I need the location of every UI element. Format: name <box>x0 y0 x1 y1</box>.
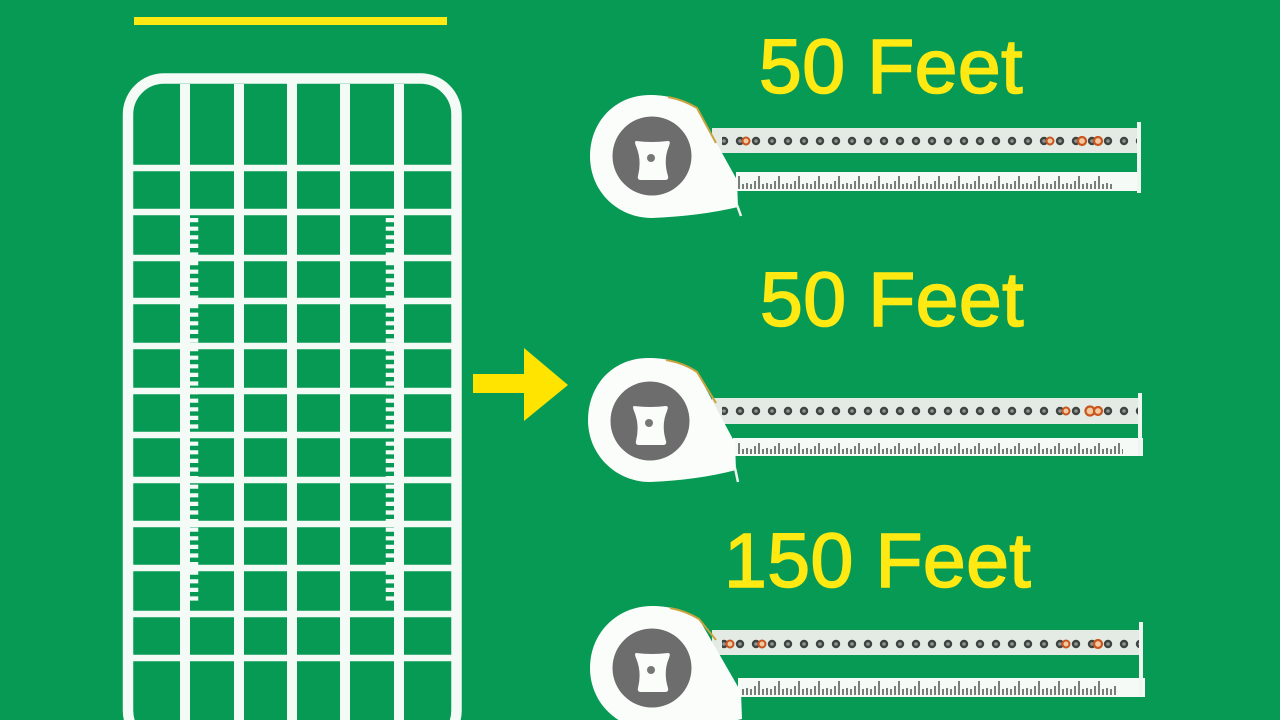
knob hole <box>647 666 655 674</box>
tape measure 2 <box>588 358 1143 482</box>
arrow <box>473 348 568 421</box>
lower tape ruler <box>736 172 1140 191</box>
heading: second 50 Feet: 50 Feet <box>760 257 1024 343</box>
top yellow line <box>134 17 447 25</box>
heading: 150 Feet: 150 Feet <box>724 518 1031 604</box>
case edge <box>670 608 716 640</box>
case edge <box>668 97 716 143</box>
grid horizontal bars <box>132 168 453 658</box>
tape end bar <box>1138 393 1142 456</box>
white grid panel <box>128 78 456 720</box>
tape case <box>588 358 736 482</box>
tape case <box>590 95 738 218</box>
case hook <box>735 468 738 482</box>
case edge <box>666 360 716 403</box>
tape end bar <box>1137 122 1141 193</box>
grid frame <box>128 78 456 720</box>
right comb teeth <box>386 218 394 604</box>
tape measure 3 <box>590 606 1145 720</box>
left comb teeth <box>190 218 198 604</box>
case hook <box>737 205 741 216</box>
tape end bar <box>1139 622 1143 697</box>
lower tape ruler <box>738 678 1145 697</box>
grid vertical bars <box>185 78 399 720</box>
knob hole <box>645 419 653 427</box>
heading: first 50 Feet: 50 Feet <box>759 24 1023 110</box>
case dial <box>610 382 690 460</box>
upper tape blade <box>712 630 1140 655</box>
tape case <box>590 606 742 720</box>
dial knob <box>635 653 670 692</box>
lower tape ruler <box>733 438 1143 456</box>
case dial <box>612 116 692 196</box>
knob hole <box>647 154 655 162</box>
dial knob <box>635 141 670 180</box>
case dial <box>612 628 692 708</box>
upper tape blade <box>712 398 1138 424</box>
upper tape blade <box>712 128 1138 153</box>
dial knob <box>633 406 668 445</box>
tape measure 1 <box>590 95 1141 218</box>
